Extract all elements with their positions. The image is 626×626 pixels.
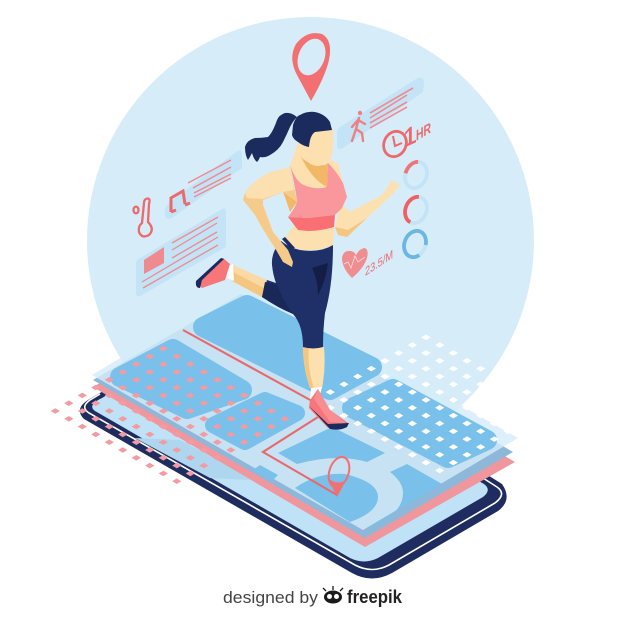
duration unit: HR	[416, 119, 431, 145]
heart rate	[342, 247, 393, 279]
text lines	[370, 88, 413, 128]
icon: freepik logo	[323, 586, 343, 604]
face	[298, 128, 333, 166]
map block: white dotted	[352, 389, 487, 458]
pin ring	[325, 454, 353, 490]
pin body	[292, 33, 330, 101]
heart pulse line	[344, 256, 365, 268]
grey-blue layer	[93, 294, 513, 538]
shoulder highlight	[245, 167, 294, 199]
white dot grid	[312, 334, 554, 473]
icon: clock	[380, 128, 410, 160]
ring 3	[400, 228, 430, 260]
freepik wordmark: freepik	[347, 587, 403, 607]
image block	[144, 247, 164, 274]
sports top	[288, 163, 347, 218]
leggings	[262, 241, 333, 348]
ring 2	[401, 194, 431, 226]
red route line	[183, 330, 337, 495]
map block: track centre	[295, 474, 378, 522]
background circle	[87, 17, 534, 464]
pin hole	[292, 35, 331, 79]
panel shape	[337, 78, 424, 149]
screen shadow	[135, 438, 250, 480]
rear calf shade	[232, 272, 264, 297]
right arm	[335, 180, 400, 237]
panel shape	[136, 208, 226, 296]
rear calf	[232, 265, 267, 297]
neck shade	[300, 155, 328, 187]
shin shade	[303, 347, 314, 388]
rear sock	[225, 264, 234, 281]
woman runner	[196, 112, 400, 430]
hair top	[292, 112, 332, 147]
top map layer	[92, 283, 518, 530]
progress rings	[400, 159, 431, 260]
torso side shade	[283, 192, 297, 212]
panel: article	[136, 208, 226, 296]
icon: runner	[352, 111, 365, 141]
map block: top of track	[278, 427, 385, 464]
credit text: designed by	[223, 588, 319, 607]
sports top band	[288, 215, 335, 231]
text lines	[142, 217, 218, 288]
pink dot grid	[51, 346, 289, 484]
map block: dotted large	[120, 349, 242, 409]
panel shape	[165, 151, 242, 219]
map block: running area	[203, 305, 372, 390]
panel: music	[165, 151, 242, 219]
rear shoe	[196, 258, 230, 288]
map block: small tab	[253, 465, 278, 481]
icon: thermometer	[134, 199, 152, 236]
phone body	[80, 320, 507, 578]
panel: route info	[337, 78, 424, 149]
front sock	[310, 387, 322, 399]
phone screen	[92, 320, 488, 562]
rear shoe sole	[196, 258, 224, 288]
front shoe lighter	[314, 389, 347, 424]
layer sheet	[92, 283, 518, 530]
icon: heart	[342, 248, 368, 278]
front shoe sole	[309, 406, 349, 430]
pin tip	[328, 478, 346, 497]
phone	[80, 320, 507, 578]
icon: music note	[171, 191, 190, 212]
heart rate value: 23.5/M	[365, 247, 393, 279]
text lines	[188, 160, 231, 197]
waist band	[282, 237, 295, 249]
clock one hour	[380, 119, 431, 160]
rear leg shade	[262, 282, 293, 314]
midriff	[285, 226, 334, 250]
front shin	[303, 347, 325, 388]
neck and chest	[290, 142, 343, 195]
big location pin	[292, 33, 331, 101]
small map pin	[325, 454, 353, 497]
leggings shade	[312, 263, 328, 295]
duration number: 1	[403, 119, 417, 154]
phone white rim	[85, 394, 502, 570]
map block: track outer	[367, 464, 442, 528]
right arm shade	[335, 218, 367, 237]
ring 1	[401, 159, 431, 191]
map block: dotted small	[213, 400, 297, 442]
pink layer	[93, 302, 515, 547]
ponytail	[245, 113, 297, 162]
front shoe	[309, 389, 348, 428]
designed by freepik credit	[223, 586, 403, 607]
left arm	[243, 167, 297, 267]
